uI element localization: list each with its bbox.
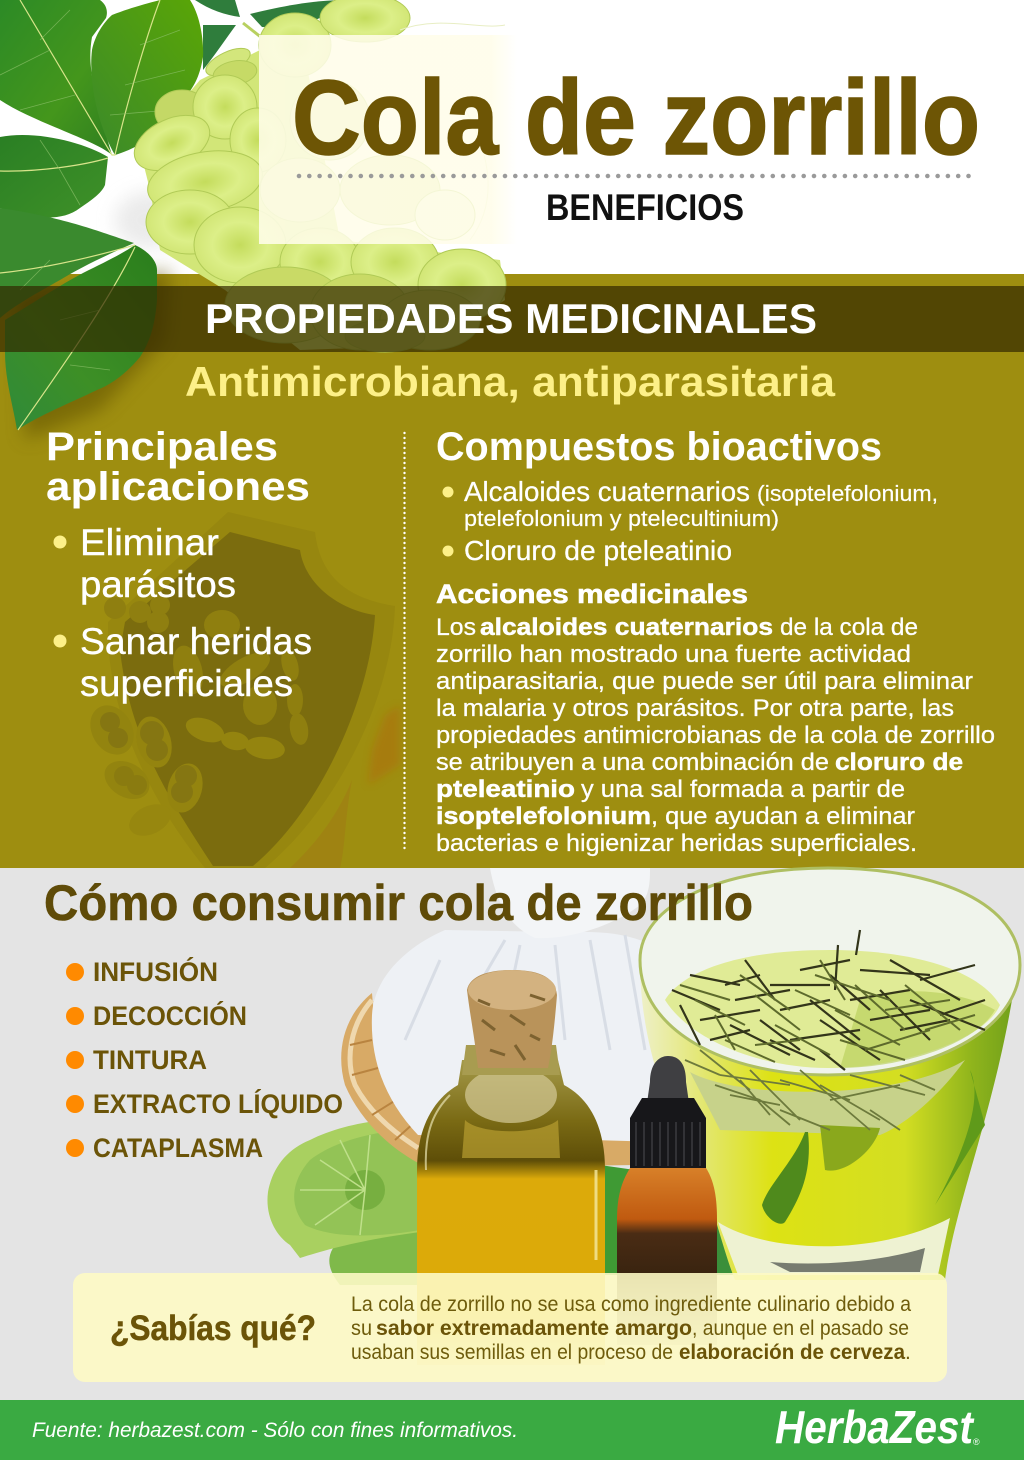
compound: pteleatine chloride: Cloruro de pteleatinio: [464, 535, 732, 566]
heading: main applications: aplicaciones: [46, 465, 310, 509]
list item: eliminate parasites: parásitos: [80, 564, 236, 605]
body text: medicinal actions: Los: [436, 614, 476, 641]
callout text: su: [351, 1317, 372, 1340]
illustration: wicker basket: [341, 993, 640, 1168]
source line: Fuente: herbazest.com - Sólo con fines informativos.: [32, 1419, 518, 1442]
item: infusion: INFUSIÓN: [93, 956, 218, 987]
item: liquid extract: EXTRACTO LÍQUIDO: [93, 1088, 343, 1119]
heading: how to consume: Cómo consumir cola de zorrillo: [44, 875, 753, 931]
body text: medicinal actions: cloruro de: [835, 749, 963, 776]
compound: quaternary alkaloids: [442, 476, 938, 531]
illustration: dropper bottle: [617, 1056, 717, 1345]
background: olive panel: [0, 274, 1024, 868]
callout text: , aunque en el pasado se: [692, 1317, 909, 1340]
list: preparation forms: [66, 956, 343, 1163]
body text: medicinal actions: pteleatinio: [436, 776, 575, 803]
compound: quaternary alkaloids: ptelefolonium y ptelecultinium): [464, 506, 779, 531]
body text: medicinal actions: zorrillo han mostrado una fuerte actividad: [436, 641, 911, 668]
subtitle: BENEFICIOS: [546, 187, 744, 228]
body text: medicinal actions: la malaria y otros parásitos. Por otra parte, las: [436, 695, 954, 722]
callout text: [351, 1293, 911, 1364]
list item: eliminate parasites: [54, 522, 236, 605]
list item: heal wounds: superficiales: [80, 663, 293, 704]
illustration: tea glass: [640, 868, 1020, 1280]
list item: eliminate parasites: Eliminar: [80, 522, 219, 563]
item: decoction: DECOCCIÓN: [93, 1000, 247, 1031]
body text: medicinal actions: de la cola de: [780, 614, 918, 641]
illustration: shield with microbes: [82, 512, 400, 868]
body text: medicinal actions: [436, 614, 995, 857]
item: tincture: TINTURA: [93, 1045, 207, 1075]
illustration: leaves: [0, 0, 345, 440]
callout text: elaboración de cerveza: [679, 1341, 905, 1364]
item: poultice: CATAPLASMA: [93, 1133, 263, 1163]
illustration: green seed leaf: [267, 1118, 790, 1285]
body text: medicinal actions: y una sal formada a partir de: [581, 776, 905, 803]
cork: [467, 970, 557, 1068]
list item: heal wounds: Sanar heridas: [80, 621, 312, 662]
translucent title panel: [259, 35, 517, 244]
callout: did you know: [73, 1273, 947, 1382]
body text: medicinal actions: , que ayudan a eliminar: [651, 803, 915, 830]
callout text: usaban sus semillas en el proceso de: [351, 1341, 673, 1364]
logo: HerbaZest: HerbaZest: [775, 1401, 974, 1453]
tea herb needles: [672, 930, 985, 1130]
body text: medicinal actions: propiedades antimicrobianas de la cola de zorrillo: [436, 722, 995, 749]
callout text: La cola de zorrillo no se usa como ingrediente culinario debido a: [351, 1293, 911, 1316]
background: gray panel: [0, 868, 1024, 1400]
body text: medicinal actions: se atribuyen a una combinación de: [436, 749, 829, 776]
callout heading: ¿Sabías qué?: [110, 1309, 316, 1348]
body text: medicinal actions: antiparasitaria, que puede ser útil para eliminar: [436, 668, 973, 695]
callout text: .: [905, 1341, 911, 1364]
illustration: samara seed cluster: [126, 0, 506, 352]
logo: HerbaZest: ®: [973, 1437, 980, 1447]
heading: bioactive compounds: Compuestos bioactivos: [436, 425, 882, 469]
illustration: muslin herb pouch: [372, 868, 670, 1142]
illustration: oil bottle: [417, 970, 605, 1365]
subheading: medicinal actions: Acciones medicinales: [436, 579, 748, 609]
compound: quaternary alkaloids: Alcaloides cuaternarios: [464, 476, 750, 507]
heading: main applications: [46, 425, 310, 509]
panel: bioactive compounds: [436, 425, 995, 857]
properties subtitle: Antimicrobiana, antiparasitaria: [185, 358, 836, 405]
callout text: sabor extremadamente amargo: [376, 1317, 692, 1340]
body text: medicinal actions: alcaloides cuaternarios: [480, 614, 773, 641]
banner heading: PROPIEDADES MEDICINALES: [205, 295, 817, 342]
background: white header: [0, 0, 1024, 274]
body text: medicinal actions: bacterias e higienizar heridas superficiales.: [436, 830, 917, 857]
heading: main applications: Principales: [46, 425, 278, 469]
panel: main applications: [46, 425, 312, 704]
footer bar: [0, 1400, 1024, 1460]
compound: quaternary alkaloids: (isoptelefolonium,: [757, 481, 938, 506]
banner: medicinal properties: [0, 286, 1024, 352]
list item: heal wounds: [54, 621, 312, 704]
body text: medicinal actions: isoptelefolonium: [436, 803, 651, 830]
